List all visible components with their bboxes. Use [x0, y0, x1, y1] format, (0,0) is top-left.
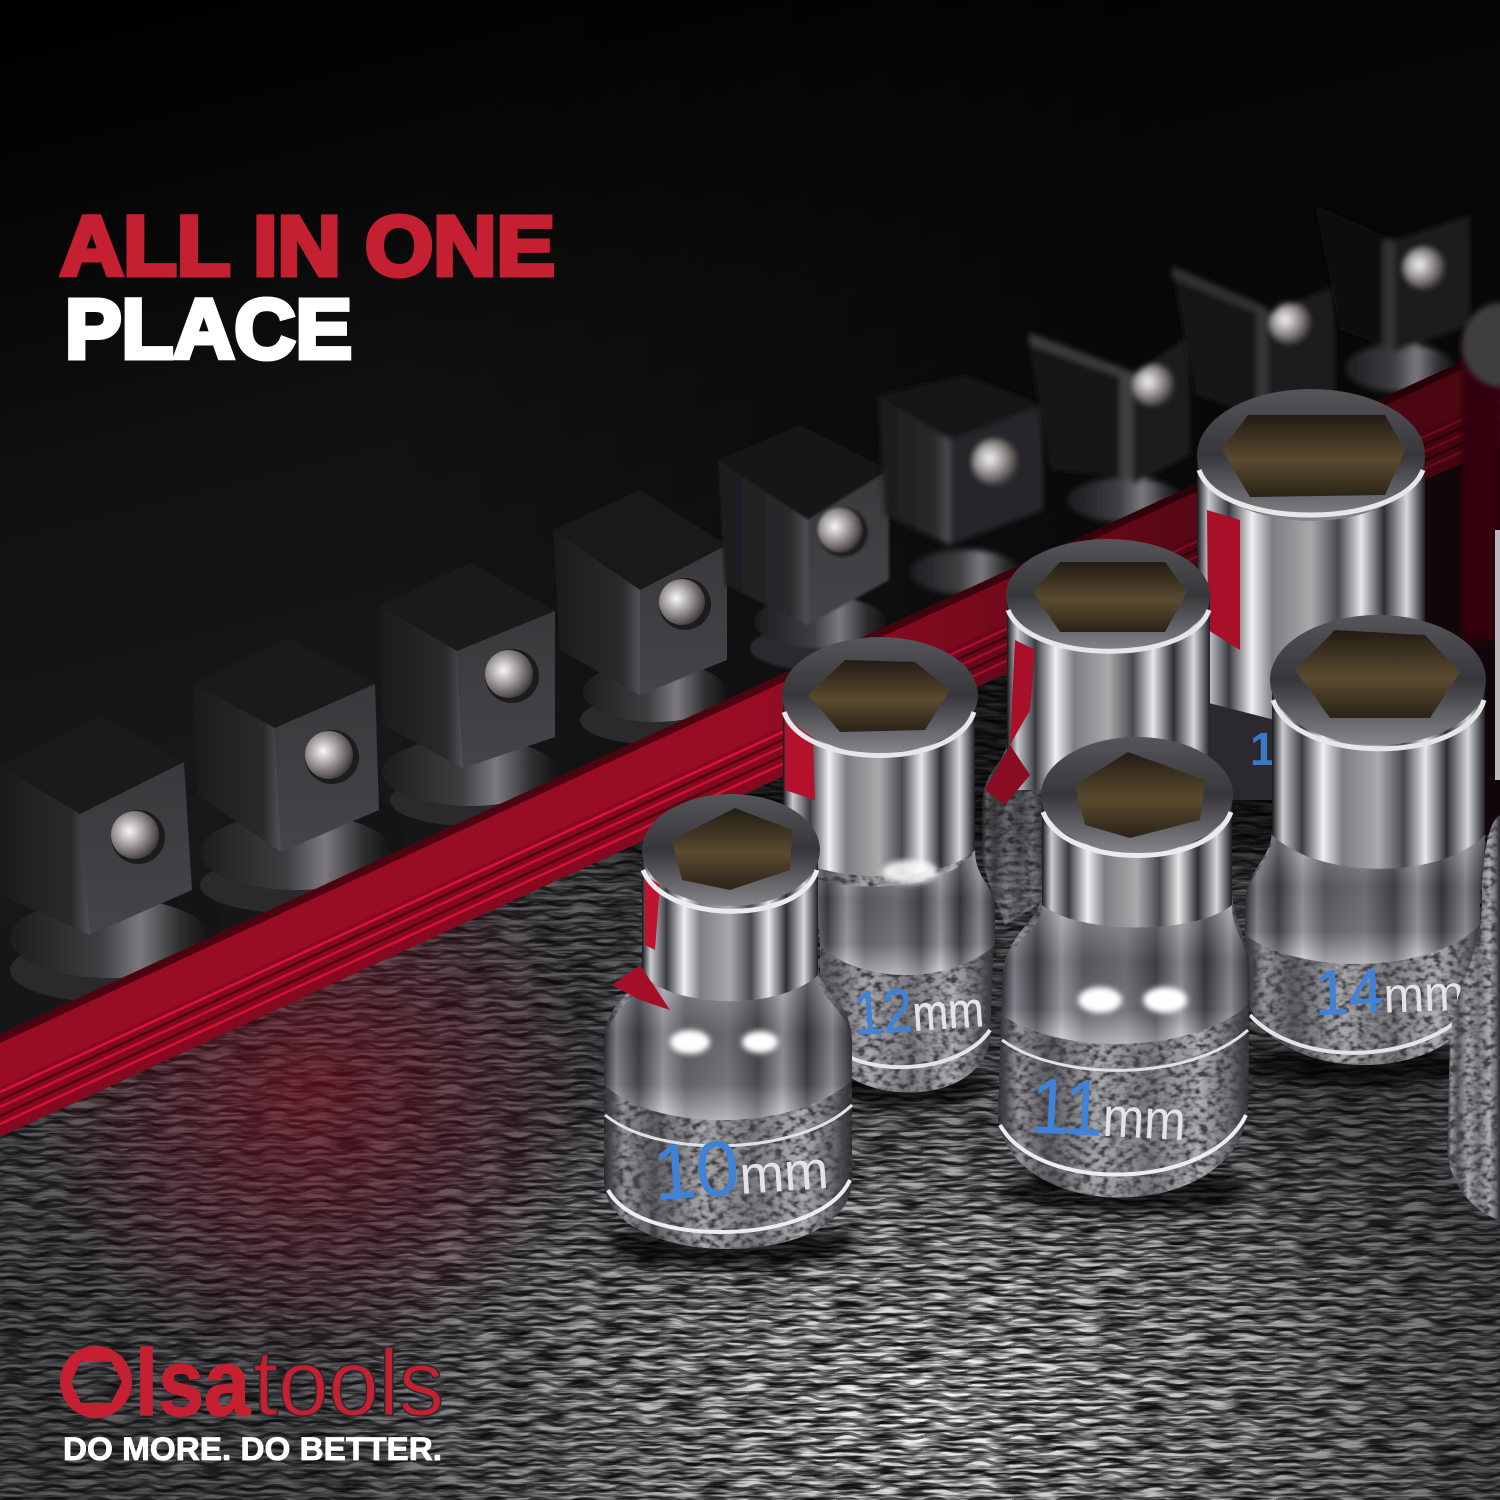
drive adapter 9: [1315, 205, 1470, 392]
size mark 12mm: 12mm: [851, 971, 986, 1049]
ball bearing 5: [818, 508, 862, 552]
size mark 11mm: 11mm: [1029, 1061, 1189, 1157]
ball bearing 7: [1133, 365, 1173, 405]
socket interior: [672, 808, 792, 890]
socket interior: [1033, 562, 1187, 632]
socket interior: [1075, 752, 1205, 838]
woven mat: [0, 674, 1500, 1500]
headline: [60, 199, 555, 376]
size mark 10mm: 10mm: [650, 1117, 831, 1217]
tagline: DO MORE. DO BETTER.: [63, 1431, 442, 1467]
ball bearing 6: [973, 440, 1017, 484]
size mark 14mm: 14mm: [1313, 952, 1465, 1029]
socket 11mm: [998, 737, 1250, 1214]
drive adapter 6: [878, 375, 1043, 594]
drive adapter 2: [193, 638, 403, 913]
socket interior: [1222, 415, 1405, 497]
partial socket top right: [1425, 303, 1500, 835]
socket 12mm: [782, 637, 995, 1107]
socket 14mm: [1245, 615, 1486, 1087]
ball bearing 9: [1404, 248, 1444, 288]
drive adapter 8: [1172, 266, 1335, 420]
socket 10mm: [604, 794, 855, 1269]
socket 15mm back: [1197, 389, 1425, 800]
drive adapter 1: [0, 715, 220, 1002]
red rail: [0, 344, 1500, 1137]
socket interior: [808, 660, 950, 732]
headline line 1: ALL IN ONE: [60, 199, 555, 293]
logo hex nut mark: [60, 1346, 132, 1418]
ball bearing 4: [659, 579, 705, 625]
logo: [60, 1330, 444, 1435]
drive adapter 3: [379, 563, 558, 826]
socket 13mm back: [982, 539, 1210, 925]
size mark fragment: 1: [1250, 723, 1276, 775]
ball bearing 3: [485, 650, 533, 698]
drive adapter 4: [553, 490, 727, 744]
ball bearing 2: [305, 731, 353, 779]
drive adapter 7: [1027, 333, 1190, 522]
socket interior: [1295, 630, 1460, 718]
logo wordmark light: tools: [253, 1330, 444, 1435]
logo wordmark bold: lsa: [135, 1330, 251, 1435]
ball bearing 1: [111, 811, 159, 859]
drive adapter 5: [718, 425, 889, 670]
ball bearing 8: [1270, 303, 1310, 343]
partial socket lower right: [1447, 815, 1500, 1220]
headline line 2: PLACE: [65, 282, 352, 376]
